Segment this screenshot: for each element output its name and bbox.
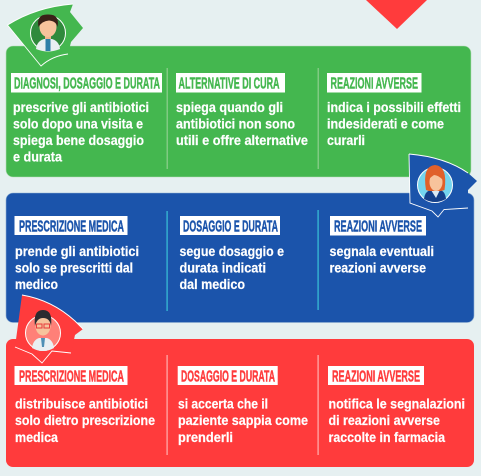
text: patient column 1 bbox=[15, 244, 139, 292]
panel: patient (blue) bbox=[6, 193, 474, 322]
text: pharmacist column 2: paziente sappia come bbox=[178, 413, 308, 428]
text: doctor column 2 bbox=[176, 100, 308, 148]
text: pharmacist column 2 bbox=[178, 396, 308, 445]
heading: dosaggio e durata bbox=[178, 366, 278, 385]
text: pharmacist column 2: prenderli bbox=[178, 430, 233, 445]
panel: pharmacist (red) bbox=[6, 339, 474, 467]
text: doctor column 2: spiega quando gli bbox=[176, 100, 283, 115]
badge: pharmacist avatar bbox=[15, 295, 83, 363]
text: patient column 2: segue dosaggio e bbox=[180, 244, 284, 259]
text: patient column 3: reazioni avverse bbox=[330, 261, 426, 276]
text: patient column 1: prende gli antibiotici bbox=[15, 244, 139, 259]
heading: reazioni avverse bbox=[330, 216, 426, 236]
text: pharmacist column 1: solo dietro prescrizione bbox=[15, 413, 155, 428]
text: pharmacist column 3: notifica le segnalazioni bbox=[328, 396, 465, 412]
text: doctor column 3: indica i possibili effetti bbox=[327, 100, 461, 115]
badge: doctor avatar bbox=[8, 4, 83, 66]
text: patient column 1: solo se prescritti dal bbox=[15, 261, 133, 276]
heading: reazioni avverse: REAZIONI AVVERSE bbox=[330, 76, 418, 92]
panel: doctor (green) bbox=[6, 46, 471, 177]
text: patient column 2: dal medico bbox=[180, 277, 245, 292]
text: doctor column 2: antibiotici non sono bbox=[176, 116, 295, 132]
badge: patient avatar bbox=[409, 154, 477, 217]
text: patient column 3: segnala eventuali bbox=[330, 244, 434, 259]
text: doctor column 1: e durata bbox=[13, 150, 62, 164]
heading: diagnosi, dosaggio e durata bbox=[11, 73, 162, 92]
text: pharmacist column 3: raccolte in farmacia bbox=[328, 430, 445, 445]
heading: prescrizione medica: PRESCRIZIONE MEDICA bbox=[19, 368, 124, 385]
heading: dosaggio e durata: DOSAGGIO E DURATA bbox=[181, 368, 275, 385]
text: patient column 2 bbox=[180, 244, 284, 292]
heading: diagnosi, dosaggio e durata: DIAGNOSI, DOSAGGIO E DURATA bbox=[14, 76, 160, 92]
heading: alternative di cura: ALTERNATIVE DI CURA bbox=[178, 76, 280, 92]
text: doctor column 3: curarli bbox=[327, 133, 365, 148]
heading: prescrizione medica bbox=[14, 216, 128, 235]
text: pharmacist column 2: si accerta che il bbox=[178, 396, 268, 412]
red arrow at top bbox=[366, 0, 427, 29]
heading: reazioni avverse bbox=[327, 73, 422, 92]
text: doctor column 1: solo dopo una visita e bbox=[13, 116, 143, 132]
text: doctor column 3 bbox=[327, 100, 461, 148]
text: pharmacist column 1: medica bbox=[15, 430, 58, 445]
heading: reazioni avverse bbox=[328, 366, 424, 385]
text: pharmacist column 1 bbox=[15, 396, 155, 445]
heading: prescrizione medica: PRESCRIZIONE MEDICA bbox=[19, 218, 124, 235]
text: patient column 3 bbox=[330, 244, 434, 276]
heading: reazioni avverse: REAZIONI AVVERSE bbox=[334, 218, 422, 236]
text: doctor column 3: indesiderati e come bbox=[327, 116, 444, 132]
text: doctor column 1: prescrive gli antibiotici bbox=[13, 100, 149, 115]
text: patient column 2: durata indicati bbox=[180, 261, 266, 276]
heading: prescrizione medica bbox=[14, 366, 128, 385]
text: pharmacist column 3 bbox=[328, 396, 465, 445]
text: pharmacist column 1: distribuisce antibiotici bbox=[15, 396, 148, 412]
heading: alternative di cura bbox=[176, 73, 285, 92]
text: doctor column 2: utili e offre alternative bbox=[176, 133, 308, 148]
text: doctor column 1 bbox=[13, 100, 149, 164]
heading: reazioni avverse: REAZIONI AVVERSE bbox=[332, 368, 420, 385]
heading: dosaggio e durata bbox=[180, 216, 280, 235]
text: doctor column 1: spiega bene dosaggio bbox=[13, 133, 144, 148]
heading: dosaggio e durata: DOSAGGIO E DURATA bbox=[183, 218, 278, 235]
text: pharmacist column 3: di reazioni avverse bbox=[328, 413, 440, 428]
text: patient column 1: medico bbox=[15, 277, 58, 292]
